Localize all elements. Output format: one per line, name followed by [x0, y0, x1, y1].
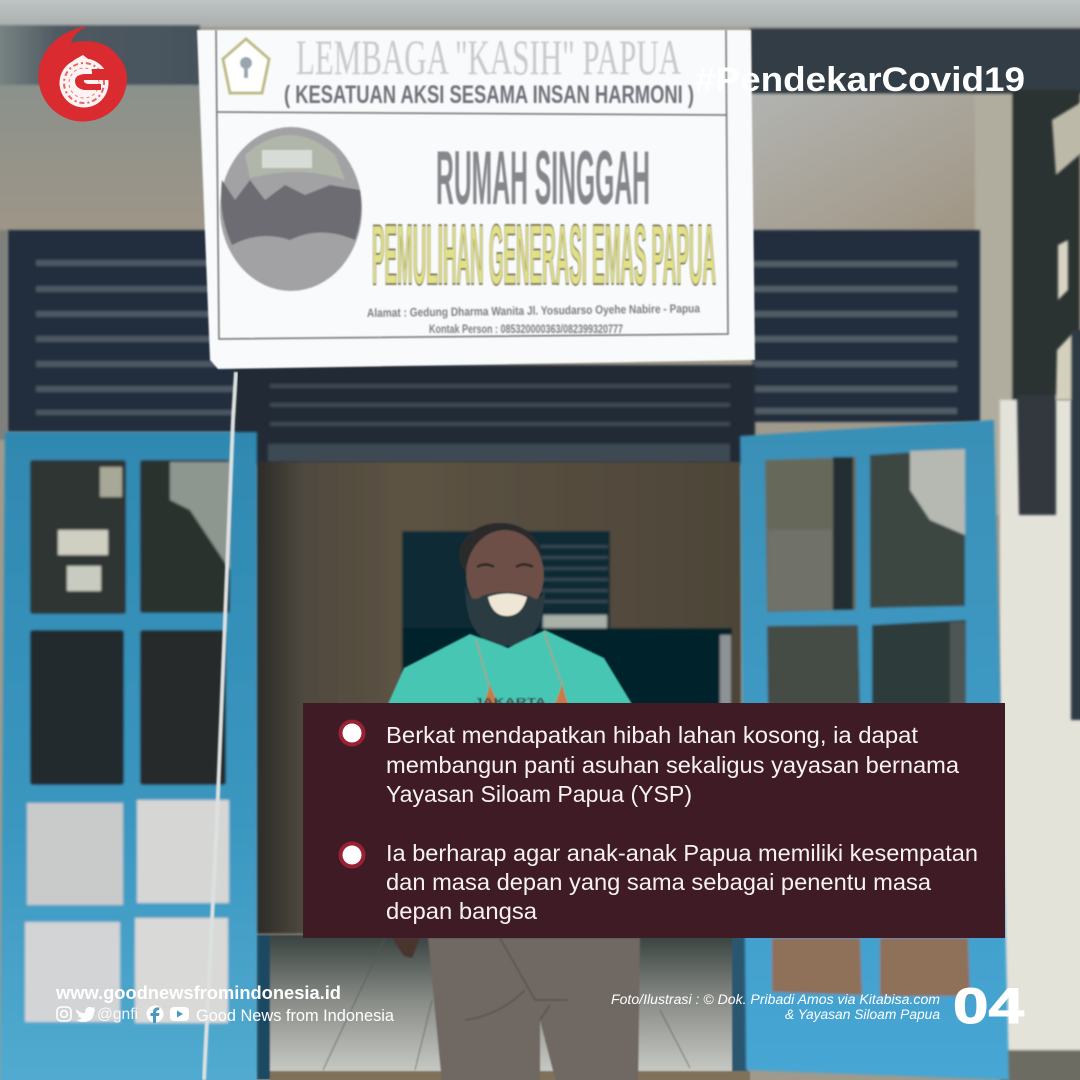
right louvre shutter	[752, 230, 980, 422]
garuda G emblem	[60, 55, 110, 108]
banner logo	[223, 39, 269, 93]
left hand	[392, 938, 420, 958]
paragraph 2: dan masa depan yang sama sebagai penentu masa	[386, 869, 931, 895]
paragraph 1: Berkat mendapatkan hibah lahan kosong, ia dapat	[386, 722, 919, 748]
trousers	[428, 938, 640, 1080]
head	[459, 523, 545, 646]
paragraph 1	[386, 722, 959, 807]
logo: Good News from Indonesia	[38, 26, 127, 122]
icon: instagram	[57, 1007, 71, 1021]
left louvre shutter	[8, 230, 240, 432]
centre louvre above door	[235, 365, 755, 465]
paragraph 1: membangun panti asuhan sekaligus yayasan bernama	[386, 752, 959, 778]
teal t-shirt	[388, 630, 632, 704]
footer: photo credit: Foto/Ilustrasi : © Dok. Pribadi Amos via Kitabisa.com	[611, 992, 940, 1007]
interior room	[256, 462, 741, 934]
paragraph 2	[386, 840, 978, 924]
bullet point 1	[338, 720, 366, 746]
banner contact: Kontak Person : 085320000363/082399320777	[429, 322, 623, 336]
website url: www.goodnewsfromindonesia.id	[55, 983, 341, 1003]
banner address: Alamat : Gedung Dharma Wanita Jl. Yosudarso Oyehe Nabire - Papua	[367, 301, 700, 320]
page number: 04	[953, 978, 1024, 1034]
bullet point 2	[338, 842, 366, 868]
dark timber post and bracing	[1017, 100, 1080, 720]
left blue door	[0, 432, 257, 1080]
banner frame lines	[216, 30, 728, 339]
footer: photo credit: & Yayasan Siloam Papua	[785, 1007, 940, 1022]
man smiling in teal shirt	[388, 523, 640, 1080]
channel name: Good News from Indonesia	[196, 1006, 395, 1025]
panel: text callout	[303, 703, 1005, 938]
banner heading: LEMBAGA "KASIH" PAPUA	[296, 29, 681, 85]
lanyard and orange print	[474, 632, 568, 708]
banner: Rumah Singgah sign	[197, 29, 755, 369]
footer: website and social handles	[55, 983, 395, 1025]
paragraph 1: Yayasan Siloam Papua (YSP)	[386, 781, 692, 807]
banner circular photo	[220, 127, 362, 291]
white hanging cord	[204, 372, 236, 1080]
handle: @gnfi	[97, 1006, 138, 1023]
lanyard and orange print: JAKARTA	[474, 697, 546, 708]
right blue door	[740, 420, 1009, 1080]
paragraph 2: Ia berharap agar anak-anak Papua memiliki kesempatan	[386, 840, 978, 866]
infographic canvas: RUMAH SINGGAH	[436, 136, 650, 221]
hashtag: PendekarCovid19: #PendekarCovid19	[695, 61, 1025, 99]
banner subheading: ( KESATUAN AKSI SESAMA INSAN HARMONI )	[284, 81, 694, 109]
icon: twitter	[76, 1007, 96, 1022]
tiled floor	[256, 935, 750, 1080]
footer: photo credit	[611, 992, 940, 1022]
icon: youtube	[170, 1007, 189, 1021]
paragraph 2: depan bangsa	[386, 898, 537, 924]
icon: facebook	[146, 1006, 164, 1023]
